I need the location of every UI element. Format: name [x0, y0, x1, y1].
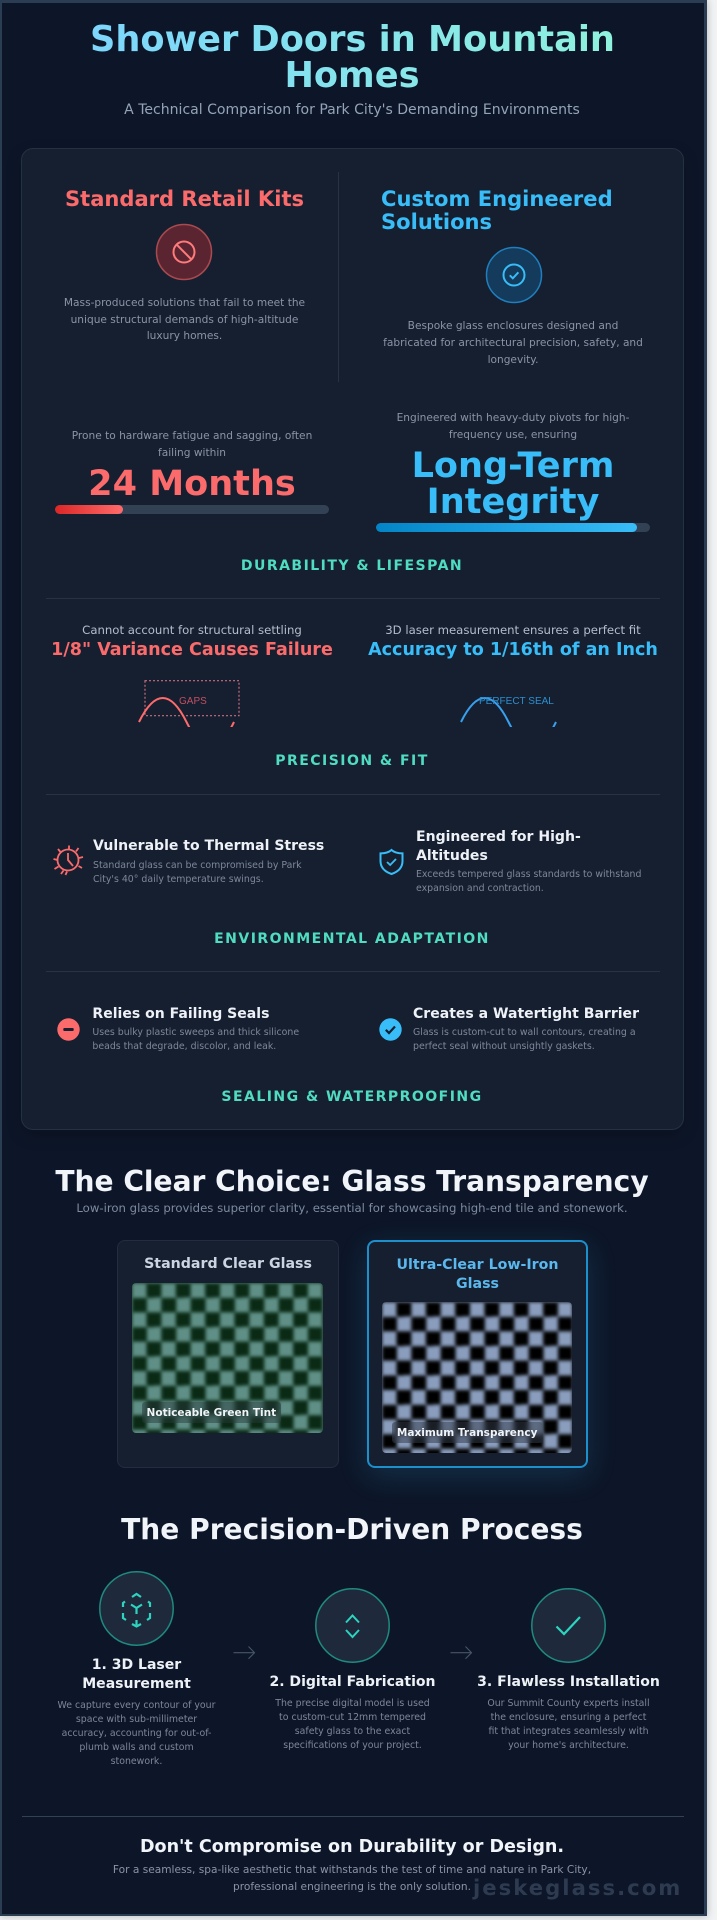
description: We capture every contour of your — [58, 1700, 215, 1711]
title: Homes — [284, 55, 420, 96]
section label: environment: ENVIRONMENTAL ADAPTATION — [214, 931, 490, 947]
stat: accuracy: Accuracy to 1/16th of an Inch — [368, 640, 658, 660]
barrier text — [413, 1006, 639, 1052]
description: Exceeds tempered glass standards to withstand — [416, 869, 641, 880]
icon: check circle — [486, 246, 542, 304]
description — [275, 1698, 430, 1751]
text: retail lifespan lead — [72, 430, 312, 459]
description: expansion and contraction. — [416, 883, 544, 894]
icon: thermal clock — [53, 846, 84, 876]
text: retail lifespan lead: failing within — [158, 447, 226, 459]
text: laser: 3D laser measurement ensures a perfect fit — [385, 623, 641, 637]
text: retail lifespan lead: Prone to hardware fatigue and sagging, often — [72, 430, 312, 442]
section label: sealing: SEALING & WATERPROOFING — [221, 1089, 483, 1105]
text: retail description: luxury homes. — [147, 330, 222, 342]
icon: check — [379, 1018, 402, 1041]
step 3 — [477, 1588, 660, 1751]
heading: clear choice: The Clear Choice: Glass Transparency — [55, 1165, 649, 1198]
description — [58, 1700, 216, 1767]
swatch: green tint — [132, 1283, 323, 1433]
diagram: gaps — [138, 680, 240, 727]
text: custom description: Bespoke glass enclosures designed and — [408, 320, 618, 332]
caption: Noticeable Green Tint — [147, 1407, 276, 1419]
icon: minus — [57, 1018, 80, 1041]
diagram: perfect seal: PERFECT SEAL — [479, 696, 554, 707]
description: Glass is custom-cut to wall contours, creating a — [413, 1027, 636, 1038]
section label: precision: PRECISION & FIT — [275, 753, 429, 769]
description: accuracy, accounting for out-of- — [62, 1728, 211, 1739]
heading: Glass — [456, 1276, 499, 1292]
heading — [82, 1657, 191, 1692]
footer heading: Don't Compromise on Durability or Design. — [140, 1837, 564, 1857]
description: the enclosure, ensuring a perfect — [491, 1712, 646, 1723]
heading: Engineered for High- — [416, 829, 581, 845]
description — [416, 869, 641, 894]
text: custom lifespan lead: frequency use, ensuring — [449, 429, 577, 441]
footer text: For a seamless, spa-like aesthetic that withstands the test of time and nature in Park City, — [113, 1864, 591, 1876]
text: custom description — [383, 320, 643, 366]
subtitle: A Technical Comparison for Park City's Demanding Environments — [124, 102, 580, 118]
stat: long-term integrity — [412, 445, 614, 522]
description — [92, 1027, 299, 1052]
footer text — [113, 1864, 591, 1893]
heading — [397, 1257, 558, 1292]
description — [487, 1698, 650, 1751]
arrow 2 — [450, 1646, 472, 1659]
card: low-iron glass — [367, 1240, 588, 1468]
description: Standard glass can be compromised by Park — [93, 860, 302, 871]
icon: chevrons — [315, 1588, 390, 1663]
heading: 2. Digital Fabrication — [269, 1674, 436, 1690]
heading: Measurement — [82, 1676, 191, 1692]
stat: variance: 1/8" Variance Causes Failure — [51, 640, 333, 660]
heading: custom engineered — [381, 186, 613, 234]
card: standard glass — [117, 1240, 339, 1468]
heading: Ultra-Clear Low-Iron — [397, 1257, 558, 1273]
description: beads that degrade, discolor, and leak. — [92, 1041, 276, 1052]
heading: 1. 3D Laser — [92, 1657, 181, 1673]
diagram: perfect seal — [460, 696, 557, 727]
heading: process: The Precision-Driven Process — [121, 1513, 583, 1546]
column divider — [338, 172, 339, 382]
icon: prohibited — [156, 224, 212, 280]
step 1 — [58, 1571, 216, 1767]
description: City's 40° daily temperature swings. — [93, 874, 264, 885]
description: safety glass to the exact — [295, 1726, 410, 1737]
heading: custom engineered: Custom Engineered — [381, 186, 613, 211]
watermark: jeskeglass.com — [473, 1875, 682, 1900]
heading: Vulnerable to Thermal Stress — [93, 838, 324, 854]
stat: 24 months: 24 Months — [88, 463, 296, 504]
step 2 — [269, 1588, 436, 1751]
bar: custom lifespan — [376, 523, 650, 532]
heading: Creates a Watertight Barrier — [413, 1006, 639, 1022]
text: custom description: longevity. — [488, 354, 538, 366]
arrow 1 — [234, 1646, 256, 1659]
text: custom lifespan lead: Engineered with heavy-duty pivots for high- — [397, 412, 629, 424]
description: fit that integrates seamlessly with — [488, 1726, 649, 1737]
stat: long-term integrity: Long-Term — [412, 445, 614, 486]
description: perfect seal without unsightly gaskets. — [413, 1041, 595, 1052]
description: Our Summit County experts install — [487, 1698, 650, 1709]
heading: Altitudes — [416, 848, 488, 864]
swatch: clear — [382, 1302, 572, 1453]
panel: comparison — [21, 148, 684, 1130]
description — [413, 1027, 636, 1052]
description: space with sub-millimeter — [76, 1714, 197, 1725]
section label: durability: DURABILITY & LIFESPAN — [241, 558, 463, 574]
description: your home's architecture. — [508, 1740, 629, 1751]
title: Shower Doors in Mountain — [90, 19, 615, 60]
heading: custom engineered: Solutions — [381, 209, 492, 234]
thermal text — [93, 838, 324, 885]
description: to custom-cut 12mm tempered — [279, 1712, 426, 1723]
caption — [392, 1422, 543, 1443]
icon: check — [531, 1588, 606, 1663]
diagram: gaps: GAPS — [179, 696, 207, 707]
icon: 3d scan — [99, 1571, 174, 1646]
text: clear choice: Low-iron glass provides superior clarity, essential for showcasing high-end tile and stonework. — [76, 1201, 628, 1215]
description: The precise digital model is used — [275, 1698, 430, 1709]
title — [90, 22, 614, 94]
description: specifications of your project. — [283, 1740, 422, 1751]
heading — [416, 829, 581, 864]
footer text: professional engineering is the only solution. — [233, 1881, 471, 1893]
text: retail description — [64, 297, 305, 342]
seals text — [92, 1006, 299, 1052]
text: custom lifespan lead — [397, 412, 629, 441]
description: stonework. — [111, 1756, 162, 1767]
text: settling: Cannot account for structural settling — [82, 623, 302, 637]
text: retail description: Mass-produced solutions that fail to meet the — [64, 297, 305, 309]
altitude text — [416, 829, 641, 894]
icon: shield — [380, 848, 404, 875]
description: Uses bulky plastic sweeps and thick silicone — [92, 1027, 299, 1038]
bar: retail lifespan — [54, 505, 329, 514]
caption: Maximum Transparency — [397, 1427, 537, 1439]
heading: Relies on Failing Seals — [92, 1006, 269, 1022]
stat: long-term integrity: Integrity — [427, 480, 599, 522]
description — [93, 860, 302, 885]
text: custom description: fabricated for architectural precision, safety, and — [383, 337, 643, 349]
text: retail description: unique structural demands of high-altitude — [71, 314, 298, 326]
heading: 3. Flawless Installation — [477, 1674, 660, 1690]
heading: standard retail kits: Standard Retail Kits — [65, 186, 304, 211]
description: plumb walls and custom — [79, 1742, 194, 1753]
caption — [142, 1402, 281, 1423]
heading: Standard Clear Glass — [144, 1256, 312, 1272]
